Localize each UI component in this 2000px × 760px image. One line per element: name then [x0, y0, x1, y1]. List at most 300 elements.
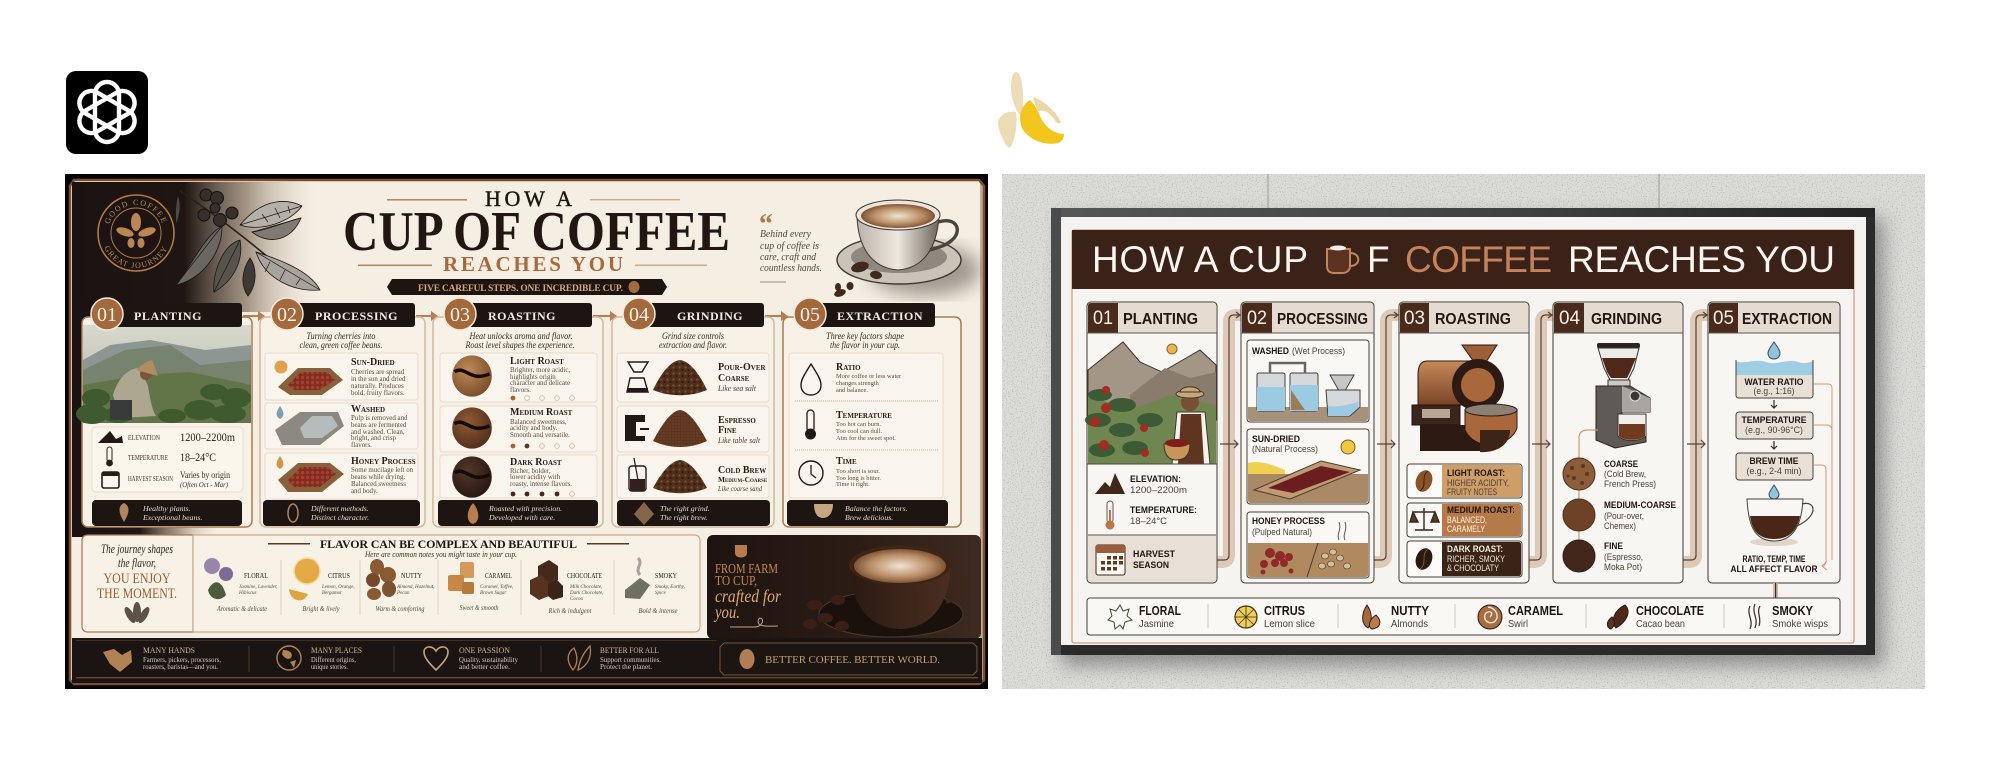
grind: fine: (Espresso,	[1604, 552, 1643, 563]
quote: cup of coffee is	[760, 241, 819, 252]
item: better for all	[568, 645, 661, 671]
card: washed: Washed	[351, 404, 385, 415]
card: honey: Some mucilage left on	[351, 467, 414, 474]
step 2: processing: Turning cherries into	[306, 331, 376, 341]
takeaway bar: The right brew.	[660, 513, 707, 522]
step 3: roasting: Heat unlocks aroma and flavor.	[469, 331, 572, 341]
card: washed: flavors.	[351, 442, 372, 449]
flavor: caramel	[448, 562, 513, 612]
card: 04 grinding	[1553, 302, 1683, 583]
step pill: PLANTING	[134, 309, 202, 323]
poster title: REACHES YOU	[1568, 239, 1835, 280]
card: sun-dried: Sun-Dried	[351, 357, 395, 368]
card: three factors: changes strength	[836, 380, 880, 387]
card: three factors: Temperature	[836, 410, 892, 421]
badge: better coffee better world	[720, 643, 977, 675]
stats card: 18–24°C	[180, 450, 216, 464]
step pill: EXTRACTION	[837, 309, 923, 323]
card: coarse: Pour-Over	[718, 362, 766, 373]
takeaway bar	[787, 500, 948, 526]
stat: elevation: ELEVATION:	[1130, 474, 1181, 485]
card: dark roast: lower acidity with	[510, 474, 561, 481]
card: light roast: highlights origin	[510, 374, 556, 381]
card: medium roast	[440, 406, 597, 452]
grind: coarse: COARSE	[1604, 459, 1638, 470]
card: 03 roasting	[1399, 302, 1529, 583]
illustration: coffee branch	[175, 189, 320, 296]
takeaway bar: Healthy plants.	[142, 504, 191, 513]
flavor: smoky: SMOKY	[655, 571, 677, 580]
photo: farmer in mountains	[76, 325, 251, 424]
step pill: 03	[450, 304, 470, 326]
flavor: floral	[204, 558, 277, 613]
card: cold brew: Cold Brew	[718, 465, 766, 476]
flow connectors	[1217, 312, 1708, 562]
step pill: ROASTING	[488, 309, 556, 323]
roast: light: LIGHT ROAST:	[1447, 468, 1505, 479]
step 4: grinding: Grind size controls	[662, 331, 724, 341]
step pill	[271, 298, 415, 330]
grind: fine: Moka Pot)	[1604, 562, 1642, 573]
item: one passion	[424, 645, 518, 671]
stat: temperature	[1106, 501, 1197, 530]
washed process: (Wet Process)	[1292, 346, 1345, 357]
card: medium roast: Smooth and versatile.	[510, 432, 570, 439]
item: many hands: Farmers, pickers, processors,	[143, 655, 221, 664]
card: light roast	[440, 353, 597, 402]
card: three factors	[789, 353, 943, 498]
card: fine	[617, 406, 769, 452]
flavor: smoky: SMOKY	[1772, 604, 1814, 618]
flavor: floral	[1108, 604, 1181, 630]
item: better for all: Support communities.	[600, 655, 661, 664]
card: washed: beans are fermented	[351, 422, 407, 429]
caption: ALL AFFECT FLAVOR	[1730, 564, 1818, 575]
card: sun-dried: in the sun and dried	[351, 376, 406, 383]
title: HOW A	[485, 186, 572, 211]
item: better for all: Protect the planet.	[600, 662, 652, 671]
icon: banana	[998, 72, 1064, 148]
takeaway bar: Distinct character.	[310, 513, 369, 522]
panel: journey note: The journey shapes	[101, 541, 173, 556]
item: many places: MANY PLACES	[311, 645, 362, 655]
shadow	[1062, 218, 1884, 666]
step pill	[444, 298, 592, 330]
card: medium roast: acidity and body.	[510, 425, 557, 432]
item: better for all: BETTER FOR ALL	[600, 645, 659, 655]
flavor: smoky	[625, 558, 685, 615]
card: cold brew	[617, 455, 769, 498]
flavor: caramel: Swirl	[1508, 618, 1528, 630]
flavor: nutty	[1363, 604, 1430, 630]
card: 02 processing: PROCESSING	[1277, 311, 1368, 328]
flavor: caramel	[1478, 604, 1563, 630]
flavor: nutty: Almonds	[1391, 618, 1428, 630]
card: three factors: Time	[836, 456, 857, 467]
takeaway bar	[263, 500, 420, 526]
roast: light: FRUITY NOTES	[1447, 487, 1497, 498]
flavor: chocolate: Milk Chocolate,	[569, 585, 602, 590]
card: fine: Like table salt	[717, 436, 761, 445]
arrows between step pills	[243, 311, 788, 321]
card: sun-dried: bold, fruity flavors.	[351, 390, 405, 397]
card: 01 planting: 01	[1093, 308, 1113, 329]
card: three factors: More coffee or less water	[836, 373, 902, 380]
left margin dark strip	[72, 300, 102, 536]
takeaway bar: Balance the factors.	[845, 504, 908, 513]
panel: flavor notes	[193, 535, 700, 632]
card: 04 grinding: GRINDING	[1591, 311, 1662, 328]
honey process: HONEY PROCESS	[1252, 516, 1326, 527]
step pill: 02	[277, 304, 297, 326]
item: many hands: MANY HANDS	[143, 645, 195, 655]
flavor: nutty: Warm & comforting	[376, 604, 425, 613]
panel: dark coffee poster	[65, 174, 988, 689]
grind: medium-coarse: MEDIUM-COARSE	[1604, 500, 1677, 511]
panel: from farm to cup	[707, 535, 981, 639]
card: light roast: Brighter, more acidic,	[510, 367, 570, 374]
panel: bottom footer strip	[72, 638, 982, 683]
panel: framed poster on concrete wall	[1002, 174, 1925, 689]
icon: mug in title	[1327, 246, 1358, 273]
card: light roast: flavors.	[510, 387, 531, 394]
card: cold brew: Like coarse sand	[717, 484, 762, 493]
flavor: citrus	[1235, 604, 1315, 630]
item: many hands	[103, 645, 221, 672]
grind: medium-coarse: Chemex)	[1604, 521, 1636, 532]
flavor: smoky: Smoke wisps	[1772, 618, 1828, 630]
stat: temperature: 18–24°C	[1130, 516, 1167, 527]
panel: flavor notes: Here are common notes you might taste in your cup.	[364, 550, 517, 559]
stats card: ELEVATION	[128, 434, 160, 442]
flavor: floral: Aromatic & delicate	[216, 604, 268, 613]
title	[343, 186, 730, 276]
step 5: extraction: the flavor in your cup.	[830, 340, 900, 350]
factor lines	[1814, 384, 1832, 570]
flavor: nutty: NUTTY	[1391, 604, 1430, 618]
arrow	[1771, 441, 1777, 449]
step pill	[623, 298, 764, 330]
card: cold brew: Medium-Coarse	[718, 475, 768, 484]
step 1: planting	[76, 298, 252, 527]
card: light roast: Light Roast	[510, 356, 564, 367]
card: washed: bright, and crisp	[351, 435, 397, 442]
card: sun-dried: Cherries are spread	[351, 369, 405, 376]
panel: flavor notes: FLAVOR CAN BE COMPLEX AND BEAUTIFUL	[320, 537, 577, 551]
card: 04 grinding: 04	[1559, 308, 1580, 329]
flavor: floral: FLORAL	[1139, 604, 1181, 618]
emblem: good coffee great journey: GOOD COFFEE	[105, 200, 167, 224]
step pill: PROCESSING	[315, 309, 398, 323]
step pill: 01	[97, 304, 117, 326]
poster title	[1072, 230, 1854, 289]
card: three factors: Too short is sour.	[836, 468, 880, 475]
card: honey: Honey Process	[351, 456, 416, 467]
card: dark roast: Richer, bolder,	[510, 468, 551, 475]
brew time box: (e.g., 2-4 min)	[1746, 466, 1802, 477]
card: medium roast: Medium Roast	[510, 407, 573, 418]
takeaway bar: Roasted with precision.	[488, 504, 562, 513]
subtitle banner: FIVE CAREFUL STEPS. ONE INCREDIBLE CUP.	[418, 284, 623, 294]
grind: fine: FINE	[1604, 541, 1624, 552]
title: REACHES YOU	[443, 252, 623, 276]
mat	[1061, 217, 1866, 645]
takeaway bar: Different methods.	[310, 504, 369, 513]
title: CUP OF COFFEE	[343, 201, 730, 263]
card: fine: Fine	[718, 425, 737, 436]
flavor: nutty: NUTTY	[401, 571, 422, 580]
card: 05 extraction: EXTRACTION	[1742, 311, 1832, 328]
step 2: processing: clean, green coffee beans.	[300, 340, 382, 350]
flavor: chocolate: Cocoa	[570, 597, 584, 602]
subtitle banner	[387, 279, 667, 295]
water ratio box: WATER RATIO	[1744, 377, 1804, 388]
card: honey: and body.	[351, 488, 378, 495]
panel: from farm to cup: crafted for	[715, 586, 782, 606]
icon: OpenAI logo tile	[66, 71, 148, 154]
item: one passion: ONE PASSION	[459, 645, 511, 655]
flavor: nutty: Almond, Hazelnut,	[396, 585, 434, 590]
icon: water drop	[1768, 342, 1780, 359]
step 2: processing	[260, 298, 425, 527]
panel: journey note	[82, 535, 193, 632]
honey process: (Pulped Natural)	[1252, 527, 1312, 538]
arrow	[1771, 400, 1777, 408]
card: dark roast: roasty, intense flavors.	[510, 481, 572, 488]
stat: elevation: 1200–2200m	[1130, 485, 1187, 496]
frame	[1051, 208, 1875, 655]
takeaway bar	[438, 500, 598, 526]
step pill	[91, 298, 242, 330]
stat: elevation	[1095, 473, 1187, 496]
roast: dark	[1407, 541, 1522, 577]
roast: medium: BALANCED,	[1447, 515, 1487, 526]
flavor: smoky: Smoky, Earthy,	[655, 585, 685, 590]
step 5: extraction	[783, 298, 961, 527]
card: three factors: Ratio	[836, 362, 861, 373]
stub to flavor strip	[1773, 583, 1778, 598]
flavor strip	[1087, 598, 1840, 635]
stats card: HARVEST SEASON	[128, 475, 173, 483]
flavor: caramel: Caramel, Toffee,	[480, 585, 513, 590]
flavor: chocolate	[1607, 604, 1704, 630]
item: one passion: Quality, sustainability	[459, 655, 518, 664]
step 5: extraction: Three key factors shape	[826, 331, 904, 341]
card: medium roast: Balanced sweetness,	[510, 419, 567, 426]
icon: brewed cup	[1747, 485, 1813, 546]
flavor: chocolate: Rich & indulgent	[548, 606, 592, 615]
washed process: WASHED	[1252, 346, 1289, 357]
takeaway bar	[617, 500, 770, 526]
flavor: citrus: CITRUS	[1264, 604, 1305, 618]
caption: RATIO, TEMP, TIME	[1742, 554, 1806, 565]
roast: dark: & CHOCOLATY	[1447, 563, 1499, 574]
flavor: smoky: Bold & intense	[638, 606, 678, 615]
card: honey: Balanced sweetness	[351, 481, 406, 488]
card: coarse: Coarse	[718, 373, 750, 384]
takeaway bar: Exceptional beans.	[142, 513, 202, 522]
card: three factors: and balance.	[836, 387, 868, 394]
quote: care, craft and	[760, 252, 817, 263]
item: many places: Different origins,	[311, 655, 356, 664]
stats card: (Often Oct - Mar)	[180, 480, 228, 489]
takeaway bar: Brew delicious.	[845, 513, 893, 522]
poster title: HOW A CUP	[1092, 239, 1308, 280]
illustration: latte cup on saucer	[833, 200, 981, 298]
temperature box: (e.g., 90-96°C)	[1745, 425, 1803, 436]
badge: better coffee better world: BETTER COFFEE. BETTER WORLD.	[765, 654, 940, 666]
card: 02 processing	[1241, 302, 1374, 583]
item: many places: unique stories.	[311, 662, 348, 671]
roast: light: HIGHER ACIDITY,	[1447, 478, 1509, 489]
flavor: citrus	[289, 558, 355, 613]
card: 03 roasting: 03	[1404, 308, 1425, 329]
panel: journey note: the flavor,	[118, 555, 156, 570]
roast: dark: RICHER, SMOKY	[1447, 554, 1505, 565]
harvest season box	[1088, 535, 1216, 582]
panel: journey note: YOU ENJOY	[104, 571, 171, 587]
card: coarse	[617, 353, 769, 402]
flavor: citrus: Bergamot	[322, 591, 342, 596]
panel: journey note: THE MOMENT.	[97, 586, 177, 602]
illustration: farmer, mountains and coffee plants	[1085, 342, 1217, 464]
top left dark vignette	[72, 182, 322, 312]
card: light roast: character and delicate	[510, 380, 570, 387]
stats card	[92, 427, 243, 492]
step pill: 05	[800, 304, 820, 326]
panel: from farm to cup: FROM FARM	[715, 562, 778, 577]
step 4: grinding	[612, 298, 774, 527]
brew time box: BREW TIME	[1750, 456, 1799, 467]
grind: fine	[1563, 540, 1643, 573]
caption	[1730, 554, 1818, 575]
emblem: good coffee great journey	[97, 194, 175, 272]
quote: countless hands.	[760, 263, 822, 274]
harvest season box: SEASON	[1133, 560, 1169, 571]
item: many places	[277, 645, 362, 671]
poster title: COFFEE	[1405, 239, 1552, 280]
card: dark roast: Dark Roast	[510, 457, 562, 468]
panel: from farm to cup: TO CUP,	[715, 574, 757, 589]
illustration: burr grinder	[1596, 343, 1650, 448]
flavor: citrus: Lemon, Orange,	[321, 585, 355, 590]
illustration: coffee roaster	[1412, 345, 1517, 452]
card: fine: Espresso	[718, 415, 756, 426]
takeaway bar: Developed with care.	[488, 513, 555, 522]
step pill	[794, 298, 935, 330]
flavor: caramel: CARAMEL	[485, 571, 512, 580]
flavor: chocolate: CHOCOLATE	[567, 571, 602, 580]
temperature box	[1736, 412, 1813, 439]
card: coarse: Like sea salt	[717, 384, 757, 393]
step 3: roasting: Roast level shapes the experience.	[465, 340, 574, 350]
card: washed: and washed. Clean,	[351, 429, 405, 436]
card: three factors: Too cool can dull.	[836, 428, 882, 435]
stats card: TEMPERATURE	[128, 454, 168, 462]
card: 05 extraction: 05	[1713, 308, 1734, 329]
flavor: floral: FLORAL	[244, 571, 268, 580]
flavor: chocolate: CHOCOLATE	[1636, 604, 1704, 618]
quote	[759, 209, 822, 282]
temperature box: TEMPERATURE	[1742, 415, 1807, 426]
card: 05 extraction	[1708, 302, 1840, 583]
flavor: floral: Jasmine, Lavender,	[239, 585, 277, 590]
item: one passion: and better coffee.	[459, 662, 510, 671]
card: washed: Pulp is removed and	[351, 415, 408, 422]
flavor: floral: Jasmine	[1139, 618, 1174, 630]
sun-dried process: (Natural Process)	[1252, 444, 1318, 455]
flavor: chocolate	[530, 560, 603, 615]
quote: “	[759, 209, 773, 240]
card: three factors: Aim for the sweet spot.	[836, 435, 896, 442]
card: 02 processing: 02	[1247, 308, 1267, 329]
flavor: caramel: Sweet & smooth	[460, 603, 499, 612]
sun-dried process: SUN-DRIED	[1252, 434, 1300, 445]
wall	[1002, 174, 1925, 689]
stat: temperature: TEMPERATURE:	[1130, 505, 1197, 516]
card: 01 planting: PLANTING	[1123, 311, 1198, 328]
honey process	[1247, 512, 1369, 578]
grind: medium-coarse	[1563, 499, 1677, 532]
brew time box	[1736, 453, 1813, 480]
flavor: nutty: Pecan	[396, 591, 410, 596]
flavor: chocolate: Cacao bean	[1636, 618, 1685, 630]
grind: coarse: (Cold Brew,	[1604, 469, 1646, 480]
card: three factors: Too long is bitter.	[836, 475, 881, 482]
step pill: 04	[629, 304, 649, 326]
panel: from farm to cup: you.	[713, 602, 740, 622]
connector line	[1579, 430, 1598, 458]
takeaway bar: The right grind.	[660, 504, 710, 513]
harvest season box: HARVEST	[1133, 549, 1175, 560]
card: honey	[265, 453, 418, 499]
sun-dried process	[1247, 429, 1369, 504]
roast: light	[1407, 464, 1522, 498]
flavor: floral: Hibiscus	[238, 591, 257, 596]
takeaway bar	[92, 500, 242, 526]
roast: medium: MEDIUM ROAST:	[1447, 505, 1515, 516]
step pill: GRINDING	[677, 309, 743, 323]
grind: medium-coarse: (Pour-over,	[1604, 511, 1644, 522]
card: 01 planting	[1085, 302, 1217, 583]
water ratio box: (e.g., 1:16)	[1754, 386, 1794, 397]
step 4: grinding: extraction and flavor.	[659, 340, 727, 350]
roast: medium	[1407, 503, 1522, 537]
emblem: good coffee great journey: GREAT JOURNEY	[105, 246, 166, 268]
step 3: roasting	[433, 298, 603, 527]
roast: dark: DARK ROAST:	[1447, 544, 1503, 555]
card: sun-dried	[265, 353, 418, 400]
grind: coarse: French Press)	[1604, 479, 1656, 490]
card: sun-dried: naturally. Produces	[351, 383, 404, 390]
flavor: smoky: Spice	[655, 591, 667, 596]
washed process	[1247, 340, 1369, 422]
water ratio box	[1736, 360, 1813, 398]
flavor: caramel: Brown Sugar	[480, 591, 506, 596]
stats card: 1200–2200m	[180, 430, 236, 444]
card: washed	[265, 403, 418, 449]
flavor: caramel: CARAMEL	[1508, 604, 1563, 618]
card: 03 roasting: ROASTING	[1435, 311, 1511, 328]
stats card: Varies by origin	[180, 470, 230, 480]
quote: Behind every	[760, 229, 811, 240]
flavor: citrus: Lemon slice	[1264, 618, 1315, 630]
flavor: nutty	[366, 559, 434, 613]
roast: medium: CARAMELY	[1447, 524, 1485, 535]
card: dark roast	[440, 455, 597, 498]
card: three factors: Too hot can burn.	[836, 421, 881, 428]
flavor: chocolate: Dark Chocolate,	[569, 591, 603, 596]
